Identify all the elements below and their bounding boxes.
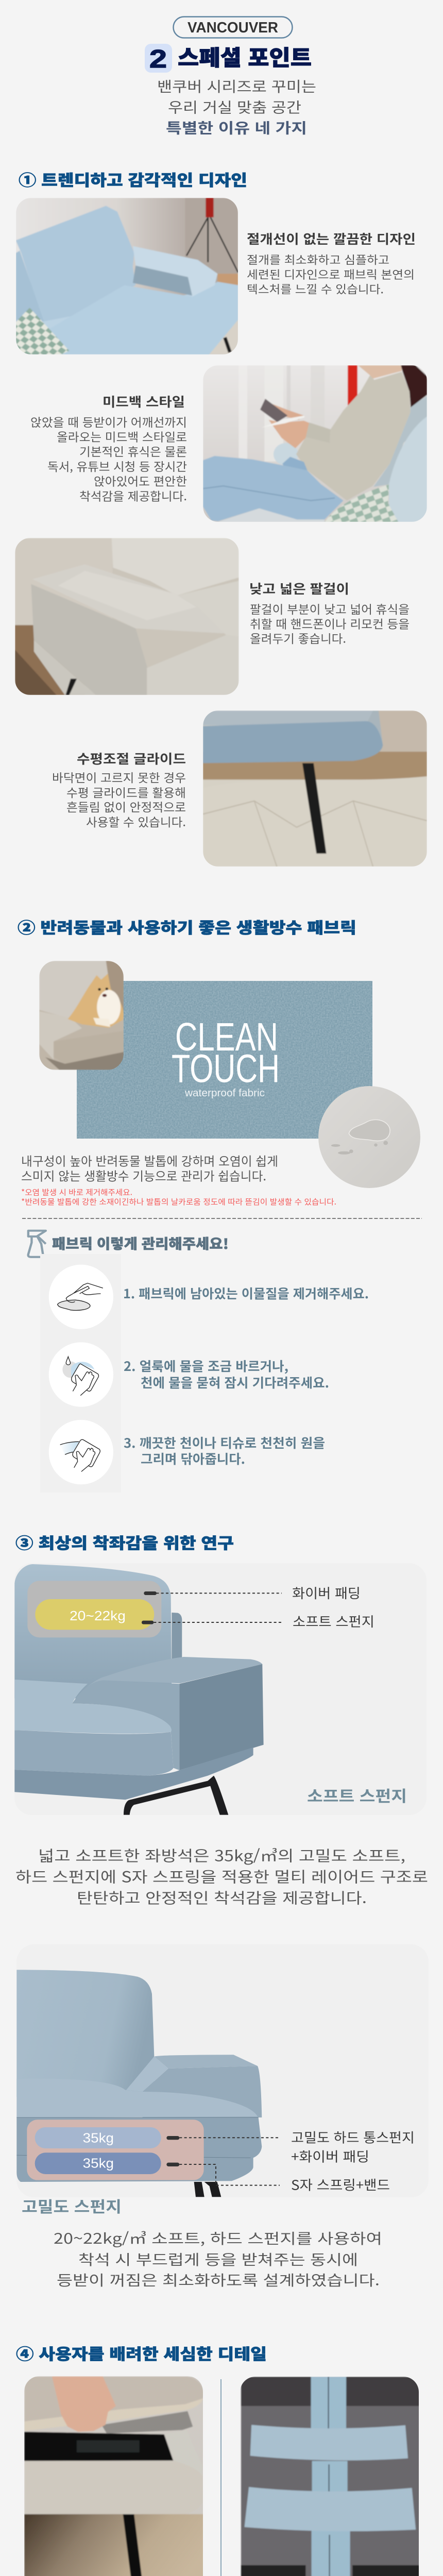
illustration: sofa cross section soft sponge — [14, 1564, 264, 1815]
overlay: density chart 20~22kg: 20~22kg — [70, 1608, 126, 1623]
overlay: density chart 35kg — [27, 2120, 280, 2185]
icon: apply water — [49, 1342, 113, 1407]
title: 스페셜 포인트 — [178, 41, 312, 72]
text: care steps — [123, 1284, 369, 1468]
text: mid-back style: 앉아있어도 편안한 — [94, 472, 187, 489]
text: clean design: 절개를 최소화하고 심플하고 — [247, 251, 389, 268]
label: soft sponge: 소프트 스펀지 — [293, 1612, 374, 1631]
text: low wide armrest — [249, 579, 410, 647]
text: mid-back style: 착석감을 제공합니다. — [79, 486, 187, 504]
text: care steps: 1. 패브릭에 남아있는 이물질을 제거해주세요. — [123, 1284, 369, 1302]
text: seat description: 넓고 소프트한 좌방석은 35kg/㎥의 고밀도 소프트, — [38, 1844, 405, 1866]
text: mid-back style — [30, 392, 187, 504]
text: seat description: 탄탄하고 안정적인 착석감을 제공합니다. — [77, 1887, 367, 1908]
overlay: density chart 20~22kg — [27, 1581, 282, 1637]
photo: water drop on fabric — [318, 1086, 420, 1188]
photo: lifting seat cushion — [24, 2377, 204, 2576]
caption: soft sponge: 소프트 스펀지 — [307, 1784, 407, 1806]
heading: section 3: ③ 최상의 착좌감을 위한 연구 — [15, 1531, 234, 1553]
photo: wide low armrest — [15, 538, 238, 695]
text: warning notes: *반려동물 발톱에 강한 소재이긴하나 발톱의 날카로움 정도에 따라 뜯김이 발생할 수 있습니다. — [21, 1196, 336, 1207]
panel: soft sponge diagram — [14, 1563, 427, 1815]
badge: VANCOUVER — [173, 16, 293, 38]
text: low wide armrest: 낮고 넓은 팔걸이 — [249, 579, 349, 598]
text: mid-back style: 독서, 유튜브 시청 등 장시간 — [47, 457, 187, 474]
text: back description — [54, 2228, 382, 2290]
text: warning notes: *오염 발생 시 바로 제거해주세요. — [21, 1187, 132, 1197]
text: leveling glide: 수평조절 글라이드 — [77, 749, 186, 768]
text: leveling glide: 수평 글라이드를 활용해 — [66, 783, 186, 801]
text: warning notes — [21, 1187, 336, 1207]
subtitle — [157, 76, 316, 138]
text: low wide armrest: 취할 때 핸드폰이나 리모컨 등을 — [250, 614, 410, 632]
caption: high density sponge: 고밀도 스펀지 — [22, 2194, 122, 2217]
label: hard sponge plus fiber padding: +화이버 패딩 — [291, 2146, 369, 2166]
text: mid-back style: 올라오는 미드백 스타일로 — [57, 428, 187, 445]
text: back description: 착석 시 부드럽게 등을 받쳐주는 동시에 — [78, 2249, 358, 2269]
text: low wide armrest: 올려두기 좋습니다. — [250, 629, 346, 647]
text: seat description — [15, 1844, 428, 1908]
photo: sofa leg on rug — [203, 710, 427, 867]
text: care steps: 천에 물을 묻혀 잠시 기다려주세요. — [141, 1373, 329, 1392]
subtitle: 밴쿠버 시리즈로 꾸미는 — [157, 76, 316, 96]
text: mid-back style: 앉았을 때 등받이가 어깨선까지 — [30, 413, 187, 430]
panel: clean touch fabric — [77, 981, 372, 1139]
text: fabric description: 내구성이 높아 반려동물 발톱에 강하며 오염이 쉽게 — [21, 1151, 278, 1170]
badge: VANCOUVER: VANCOUVER — [188, 20, 278, 36]
panel: clean touch fabric: waterproof fabric — [184, 1088, 265, 1099]
text: clean design: 세련된 디자인으로 패브릭 본연의 — [247, 266, 415, 282]
overlay: density chart 35kg: 35kg — [83, 2130, 114, 2145]
text: clean design: 절개선이 없는 깔끔한 디자인 — [247, 229, 416, 248]
label: hard sponge plus fiber padding — [291, 2128, 415, 2166]
panel: care icons column — [40, 1254, 121, 1493]
text: clean design — [247, 229, 416, 297]
label: hard sponge plus fiber padding: 고밀도 하드 통스펀지 — [291, 2128, 415, 2146]
heading: fabric care: 패브릭 이렇게 관리해주세요! — [52, 1233, 229, 1253]
icon: wipe with cloth — [49, 1420, 113, 1484]
photo: light blue sofa with lamp — [16, 198, 238, 354]
text: clean design: 텍스처를 느낄 수 있습니다. — [247, 281, 384, 297]
text: care steps: 2. 얼룩에 물을 조금 바르거나, — [124, 1357, 288, 1375]
photo: woman reading on sofa — [203, 365, 427, 522]
label: S spring and band: S자 스프링+밴드 — [291, 2175, 390, 2194]
text: seat description: 하드 스펀지에 S자 스프링을 적용한 멀티 레이어드 구조로 — [15, 1865, 428, 1887]
panel: clean touch fabric: CLEAN — [175, 1015, 278, 1059]
text: back description: 등받이 꺼짐은 최소화하도록 설계하였습니다. — [57, 2269, 380, 2290]
heading: section 2: ② 반려동물과 사용하기 좋은 생활방수 패브릭 — [18, 915, 356, 938]
photo: velcro module connection — [241, 2377, 421, 2576]
label: fiber padding: 화이버 패딩 — [292, 1583, 361, 1602]
text: leveling glide: 사용할 수 있습니다. — [86, 812, 186, 830]
panel: clean touch fabric: TOUCH — [172, 1047, 280, 1091]
illustration: sofa cross section hard sponge — [16, 1970, 262, 2197]
photo: dog on sofa — [39, 961, 124, 1070]
text: back description: 20~22kg/㎥ 소프트, 하드 스펀지를 사용하여 — [54, 2228, 382, 2248]
text: mid-back style: 미드백 스타일 — [103, 392, 185, 411]
subtitle: 우리 거실 맞춤 공간 — [168, 97, 301, 117]
text: fabric description: 스미지 않는 생활방수 기능으로 관리가 쉽습니다. — [21, 1166, 266, 1184]
icon: remove foreign matter — [49, 1265, 113, 1329]
heading: section 1: ① 트렌디하고 감각적인 디자인 — [19, 168, 247, 191]
text: mid-back style: 기본적인 휴식은 물론 — [79, 442, 187, 460]
subtitle: 특별한 이유 네 가지 — [166, 117, 307, 138]
title: 2 — [149, 45, 167, 73]
text: leveling glide: 바닥면이 고르지 못한 경우 — [52, 768, 186, 786]
overlay: density chart 35kg: 35kg — [83, 2155, 114, 2171]
text: leveling glide — [52, 749, 186, 830]
text: low wide armrest: 팔걸이 부분이 낮고 넓어 휴식을 — [250, 600, 410, 617]
text: leveling glide: 흔들림 없이 안정적으로 — [66, 798, 186, 815]
text: care steps: 3. 깨끗한 천이나 티슈로 천천히 원을 — [124, 1433, 325, 1452]
text: care steps: 그리며 닦아줍니다. — [141, 1449, 245, 1468]
heading: section 4: ④ 사용자를 배려한 세심한 디테일 — [16, 2342, 267, 2364]
text: fabric description — [21, 1151, 278, 1184]
icon: spray bottle — [28, 1231, 46, 1257]
panel: high density sponge diagram — [16, 1970, 413, 2197]
